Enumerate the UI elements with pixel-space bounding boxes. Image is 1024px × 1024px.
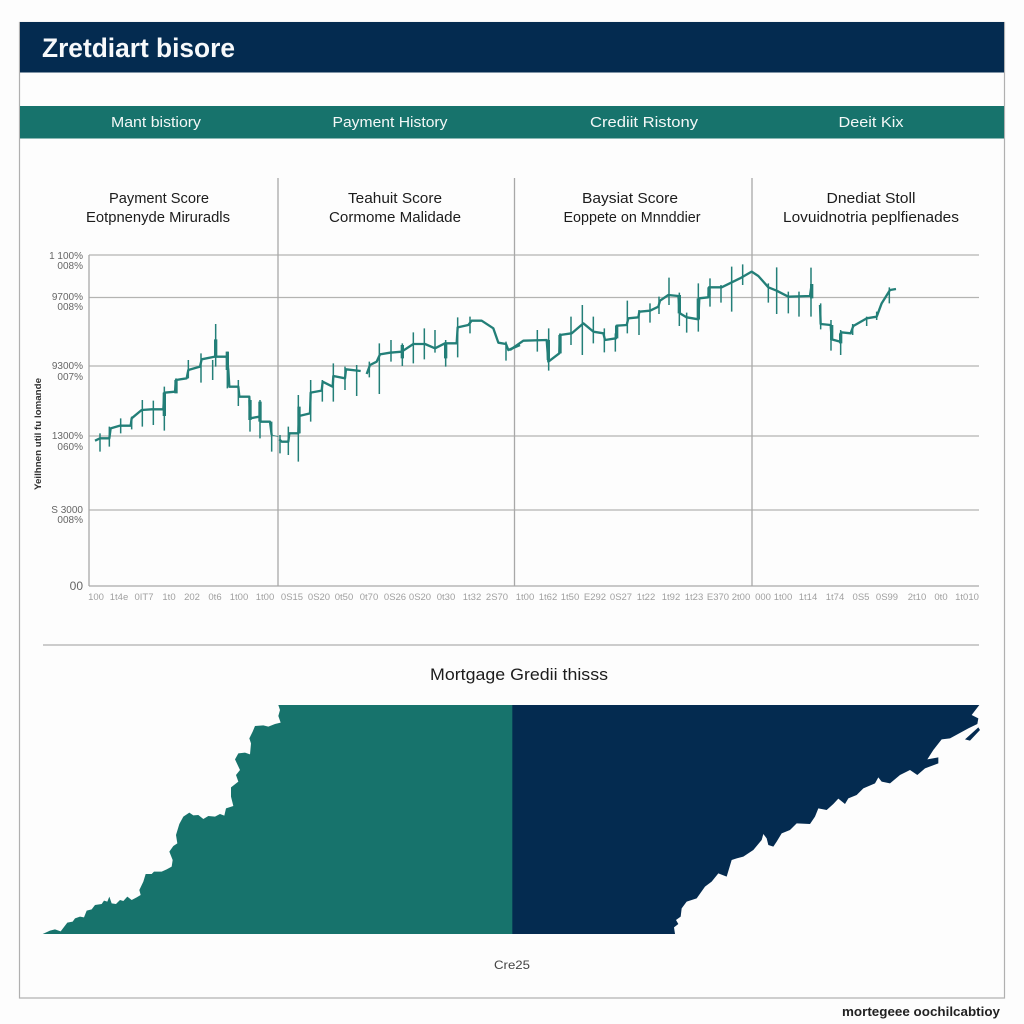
x axis labels: 1t22 <box>637 592 655 603</box>
section divider <box>43 644 979 646</box>
tab label 3: Crediit Ristony <box>590 114 699 131</box>
column heading 3 <box>564 190 701 226</box>
column heading 4: Dnediat Stoll <box>826 190 916 207</box>
x axis labels: E292 <box>584 592 606 603</box>
x axis labels: 0S99 <box>876 592 898 603</box>
y axis labels: 008% <box>57 302 83 313</box>
y axis labels: 060% <box>57 442 83 453</box>
area chart title: Mortgage Gredii thisss <box>430 666 608 684</box>
x axis labels: 2t10 <box>908 592 926 603</box>
x axis labels: 1t74 <box>826 592 844 603</box>
column heading 2: Cormome Malidade <box>329 209 461 226</box>
x axis labels: 0t70 <box>360 592 378 603</box>
y axis labels: 1300% <box>52 431 83 442</box>
x axis labels: 1t010 <box>955 592 979 603</box>
x axis labels: 1t92 <box>662 592 680 603</box>
y axis labels: 1 100% <box>49 251 83 262</box>
x axis labels: 1t00 <box>516 592 534 603</box>
x axis labels: 1t32 <box>463 592 481 603</box>
x axis labels: 2t00 <box>732 592 750 603</box>
column heading 4 <box>783 190 959 226</box>
column heading 1 <box>86 190 230 226</box>
y axis labels: 00 <box>70 579 83 593</box>
y axis labels: 008% <box>57 515 83 526</box>
column heading 1: Payment Score <box>109 190 209 207</box>
x axis labels: 1t00 <box>230 592 248 603</box>
y axis labels: 9300% <box>52 361 83 372</box>
header banner with title <box>20 22 1004 72</box>
x axis labels: 1t14 <box>799 592 817 603</box>
score line series <box>95 264 896 462</box>
column heading 1: Eotpnenyde Miruradls <box>86 209 230 226</box>
x axis labels: 0S15 <box>281 592 303 603</box>
y axis title: Yeilhnen util fu lomande <box>33 378 44 490</box>
line segment 1 <box>95 317 520 462</box>
x axis labels: 0S26 <box>384 592 406 603</box>
y axis labels: 008% <box>57 261 83 272</box>
footer note: mortegeee oochilcabtioy <box>842 1005 1000 1019</box>
x axis labels: 100 <box>88 592 104 603</box>
x axis labels: 0S20 <box>308 592 330 603</box>
tab label 4: Deeit Kix <box>838 114 904 131</box>
column heading 2: Teahuit Score <box>348 190 442 207</box>
column heading 3: Eoppete on Mnnddier <box>564 209 701 226</box>
column heading 2 <box>329 190 461 226</box>
x axis labels: 1t0 <box>162 592 176 603</box>
x axis labels: 0S27 <box>610 592 632 603</box>
x axis labels: 202 <box>184 592 200 603</box>
teal area <box>43 705 513 934</box>
x axis labels: 1t00 <box>774 592 792 603</box>
area chart <box>43 705 980 934</box>
x axis labels: 2S70 <box>486 592 508 603</box>
x axis labels: 0t0 <box>934 592 948 603</box>
x axis labels: 1t50 <box>561 592 579 603</box>
line segment 2 <box>510 264 896 371</box>
x axis labels: 1t23 <box>685 592 703 603</box>
y axis labels: S 3000 <box>51 505 83 516</box>
x axis labels: 0S20 <box>409 592 431 603</box>
navy area <box>512 705 980 934</box>
line chart <box>33 178 979 603</box>
x axis labels: 0t50 <box>335 592 353 603</box>
x axis labels: 0t6 <box>208 592 222 603</box>
chart grid <box>89 178 979 586</box>
y axis labels: 007% <box>57 372 83 383</box>
y axis labels: 9700% <box>52 292 83 303</box>
column heading 3: Baysiat Score <box>582 190 678 207</box>
x axis labels: 000 <box>755 592 771 603</box>
x axis labels: 0S5 <box>853 592 869 603</box>
column heading 4: Lovuidnotria peplfienades <box>783 209 959 226</box>
tab label 1: Mant bistiory <box>111 114 202 131</box>
y axis labels <box>49 251 83 593</box>
x axis labels: 1t62 <box>539 592 557 603</box>
x axis labels: E370 <box>707 592 729 603</box>
x axis labels: 0t30 <box>437 592 455 603</box>
x axis labels <box>88 592 979 603</box>
title: Zretdiart bisore <box>42 33 235 63</box>
x axis labels: 1t4e <box>110 592 128 603</box>
x axis labels: 0IT7 <box>134 592 154 603</box>
x axis labels: 1t00 <box>256 592 274 603</box>
area chart axis label: Cre25 <box>494 958 530 972</box>
tab label 2: Payment History <box>332 114 448 131</box>
tab band <box>20 106 1004 138</box>
